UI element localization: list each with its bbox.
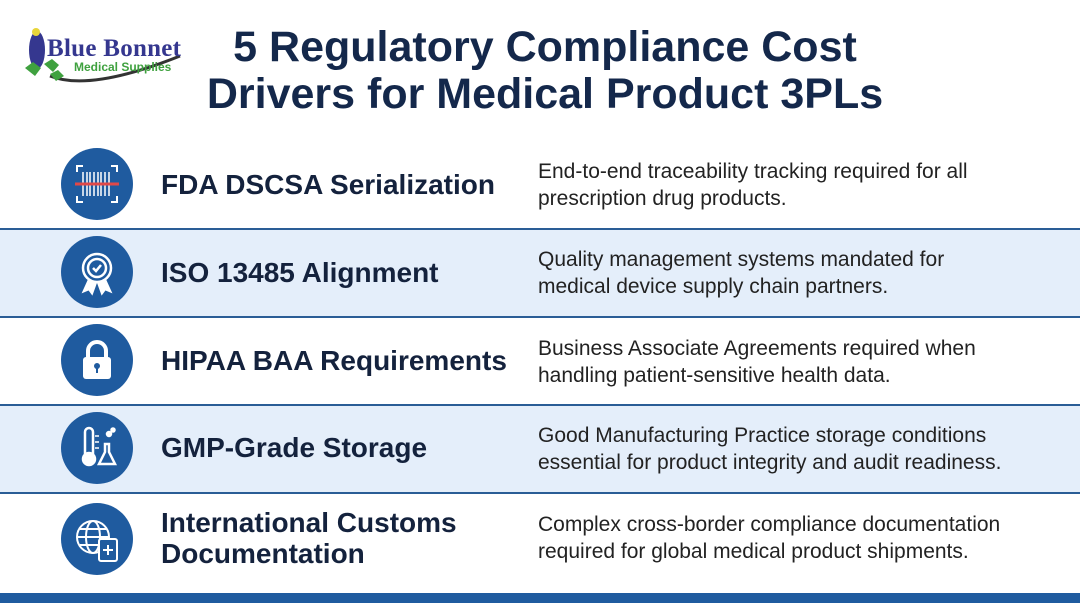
row: ISO 13485: Quality management systems mandated for — [538, 248, 944, 271]
row: FDA DSCSA — [61, 148, 968, 220]
row: Customs: Complex cross-border compliance documentation — [538, 513, 1000, 536]
row: HIPAA: handling patient-sensitive health data. — [538, 364, 891, 387]
row: ISO 13485 — [0, 230, 1080, 316]
row: HIPAA: HIPAA BAA Requirements — [161, 345, 507, 376]
row: Customs — [61, 503, 1000, 575]
row: HIPAA — [61, 324, 976, 396]
icon: award — [61, 236, 133, 308]
row: FDA DSCSA: FDA DSCSA Serialization — [161, 169, 495, 200]
row: HIPAA: Business Associate Agreements required when — [538, 337, 976, 360]
title — [207, 23, 883, 118]
icon: barcode — [61, 148, 133, 220]
logo: Medical Supplies — [74, 60, 172, 74]
row: Customs: required for global medical product shipments. — [538, 540, 969, 563]
icon: globe and passport — [61, 503, 133, 575]
title: Drivers for Medical Product 3PLs — [207, 70, 883, 118]
row: GMP: Good Manufacturing Practice storage conditions — [538, 424, 986, 447]
row: GMP: GMP-Grade Storage — [161, 432, 427, 463]
icon: padlock — [61, 324, 133, 396]
row: GMP — [0, 406, 1080, 492]
title: 5 Regulatory Compliance Cost — [233, 23, 857, 71]
row: FDA DSCSA: prescription drug products. — [538, 187, 787, 210]
bottom bar — [0, 593, 1080, 603]
row: GMP: essential for product integrity and audit readiness. — [538, 451, 1001, 474]
icon: thermometer and flask — [61, 412, 133, 484]
row: FDA DSCSA: End-to-end traceability tracking required for all — [538, 160, 968, 183]
row: ISO 13485: medical device supply chain partners. — [538, 275, 888, 298]
row: ISO 13485: ISO 13485 Alignment — [161, 257, 438, 288]
logo: Blue Bonnet — [47, 35, 182, 62]
row: Customs: Documentation — [161, 538, 365, 569]
row: Customs: International Customs — [161, 507, 457, 538]
logo — [25, 28, 182, 82]
